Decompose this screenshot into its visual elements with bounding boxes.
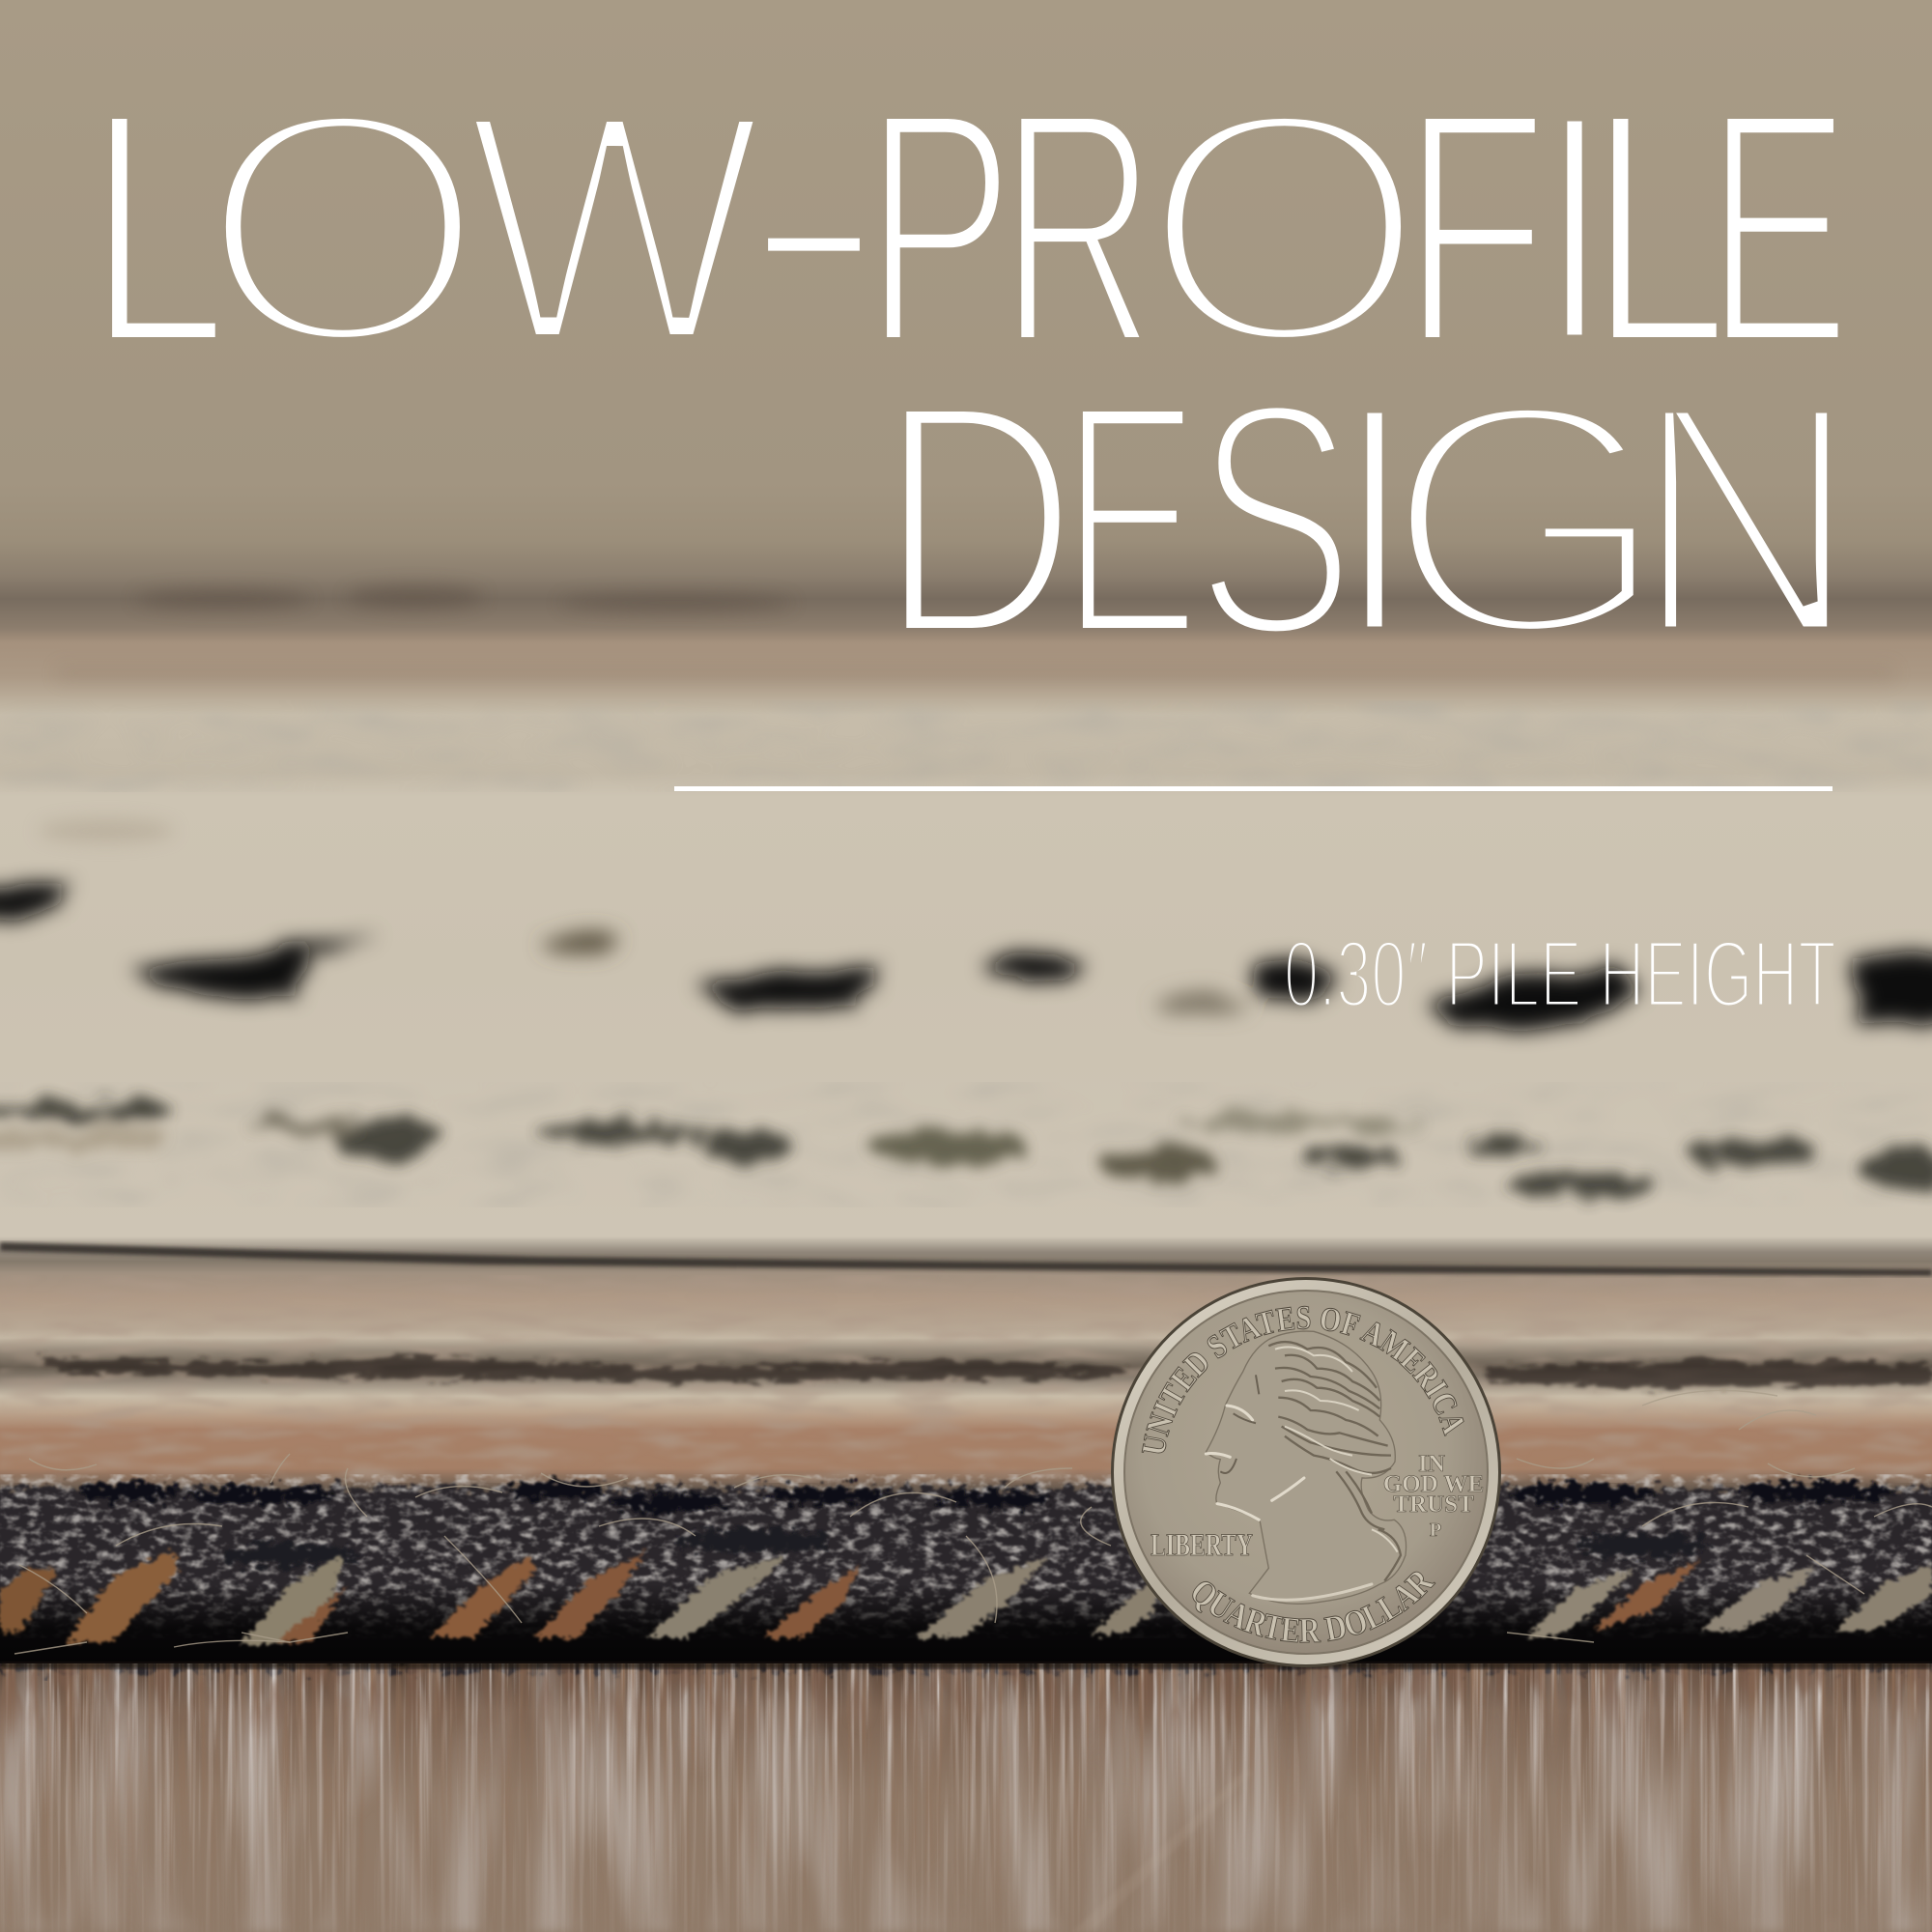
title line 2: G: [1382, 333, 1671, 706]
blurred rug pattern: olive mottled row: [0, 1101, 1932, 1196]
rope edge: twisted strands: [0, 1550, 1932, 1644]
title line 1: E: [1706, 42, 1851, 414]
hair waves: [1268, 1342, 1401, 1581]
title line 2: N: [1632, 333, 1861, 706]
blurred mottled cream band: [0, 700, 1932, 792]
coin lettering: QUARTER DOLLAR: QUARTER DOLLAR: [1192, 1571, 1435, 1643]
blurred rug pattern: dark diamonds row: [0, 884, 1932, 1028]
blurred mottled cream row: [0, 1082, 1932, 1208]
title: LOW-PROFILE DESIGN: [112, 118, 1837, 632]
facial highlights: [1206, 1406, 1372, 1600]
quarter coin: [1111, 1277, 1501, 1667]
rope edge: dark body: [0, 1488, 1932, 1671]
rope edge: lower shadow: [0, 1584, 1932, 1663]
title line 1: L: [87, 42, 228, 414]
title line 1: P: [865, 42, 1014, 414]
coin face: [1124, 1291, 1488, 1654]
rope edge: upper fuzzy fibre texture: [0, 1474, 1932, 1638]
rope edge: stray fibres: [14, 1390, 1932, 1654]
coin lettering: motto: IN: [1418, 1451, 1445, 1477]
title line 1: -: [739, 32, 889, 405]
coin lettering: motto: TRUST: [1393, 1492, 1474, 1518]
rug border stripe texture: [0, 1275, 1932, 1483]
coin lettering: motto: P: [1430, 1520, 1441, 1541]
title line 1: W: [464, 42, 768, 414]
title line 1: L: [1588, 42, 1729, 414]
title line 2: E: [1062, 333, 1200, 706]
title line 1: F: [1402, 42, 1548, 414]
coin lettering: UNITED STATES OF AMERICA: UNITED STATES OF AMERICA: [1142, 1306, 1464, 1453]
dark border line of rug pattern: [0, 1242, 1932, 1276]
title line 1: I: [1528, 42, 1621, 414]
hair highlights: [1275, 1347, 1398, 1552]
wood floor: streaks: [0, 1662, 1932, 1932]
title line 1: O: [1140, 42, 1429, 414]
title line 2: D: [878, 333, 1078, 706]
Washington bust: [1206, 1331, 1406, 1604]
coin outer edge: [1111, 1277, 1501, 1667]
title line 2: I: [1328, 333, 1421, 706]
facial shadows: [1220, 1375, 1259, 1473]
title line 1: R: [1000, 42, 1156, 414]
coin lettering: motto: [1383, 1451, 1484, 1541]
blurred far band specks: [39, 585, 1893, 842]
title line 2: S: [1195, 333, 1355, 706]
rug mottled dark stripe: [39, 1356, 1932, 1389]
coin lettering: motto: GOD WE: [1383, 1471, 1484, 1497]
coin lettering: LIBERTY: LIBERTY: [1151, 1528, 1253, 1563]
title line 1: O: [198, 42, 488, 414]
rope edge: black clumps along top: [82, 1481, 1893, 1567]
coin rim: [1114, 1280, 1498, 1664]
